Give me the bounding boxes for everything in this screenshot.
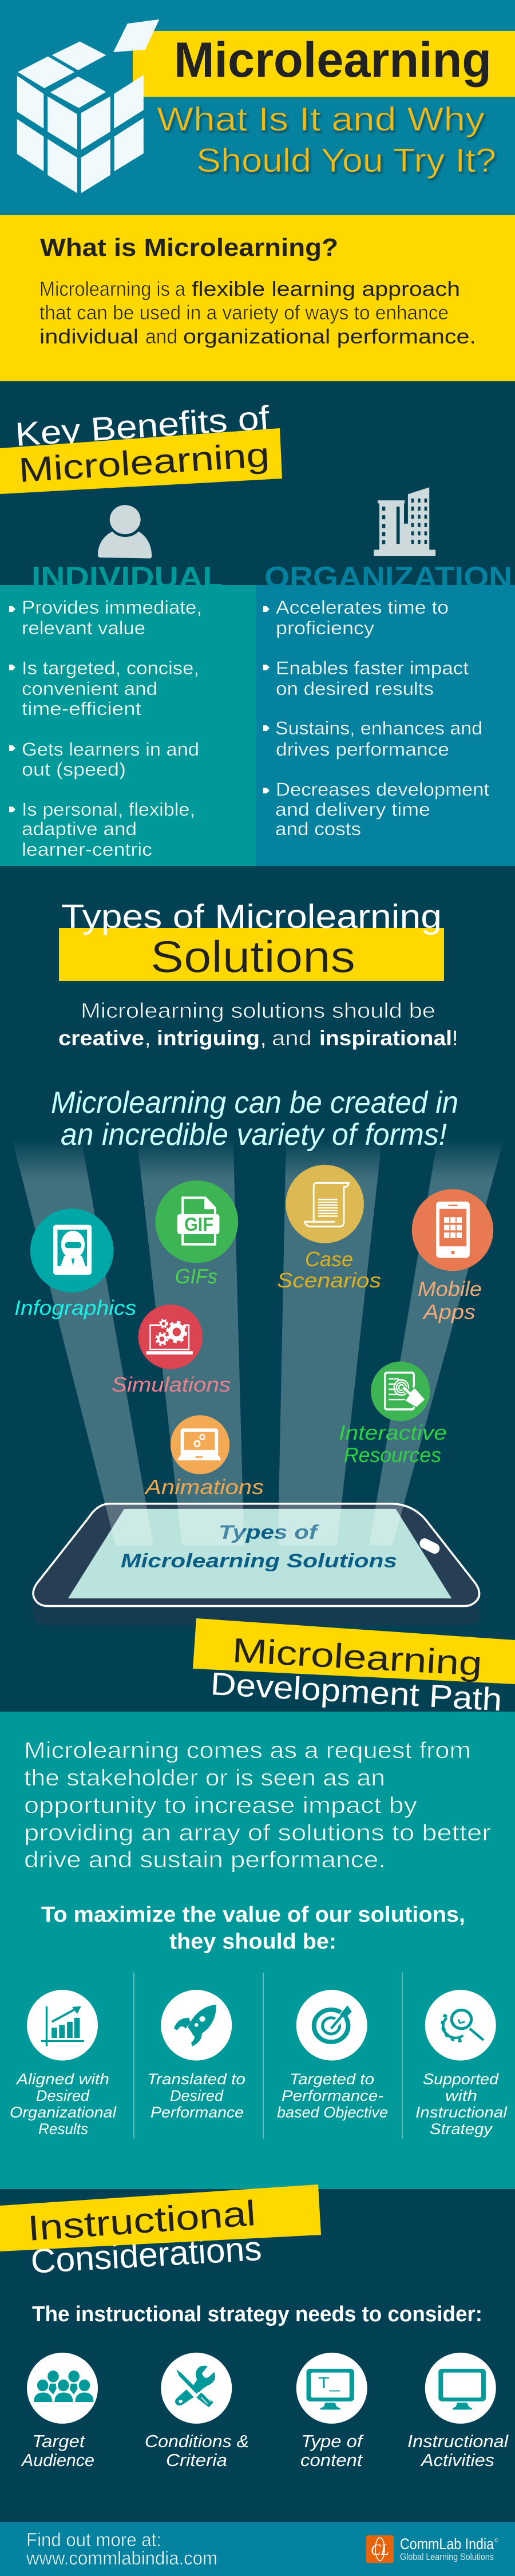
benefits list: Enables faster impact bbox=[276, 658, 469, 678]
definition text: individual bbox=[39, 325, 138, 348]
icon: rocket bbox=[161, 1990, 232, 2061]
label: conditions and criteria: Conditions & bbox=[145, 2431, 249, 2451]
icon: tools bbox=[161, 2353, 232, 2424]
subtitle: What Is It and Why bbox=[157, 101, 485, 138]
heading: What is Microlearning? bbox=[40, 234, 338, 262]
icon: monitor with text bbox=[296, 2353, 367, 2424]
text: solutions should be: inspirational bbox=[319, 1026, 452, 1050]
label: supported with instructional strategy: Supported bbox=[423, 2071, 499, 2088]
find out more: Find out more at: bbox=[26, 2529, 161, 2550]
find out more bbox=[26, 2529, 217, 2569]
label: aligned with desired organizational results: Results bbox=[38, 2120, 88, 2138]
label: conditions and criteria bbox=[145, 2431, 249, 2470]
phone screen text bbox=[121, 1522, 397, 1572]
heading: development path: Development Path bbox=[209, 1665, 503, 1717]
benefits list bbox=[275, 597, 489, 839]
label: translated to desired performance: Performance bbox=[150, 2104, 244, 2121]
subheading bbox=[41, 1903, 465, 1954]
benefits list: Is targeted, concise, bbox=[22, 658, 199, 678]
bullet markers bbox=[9, 606, 15, 812]
heading: key benefits: Microlearning bbox=[18, 436, 271, 489]
label: targeted to performance-based objective bbox=[277, 2071, 388, 2121]
subheading: To maximize the value of our solutions, bbox=[41, 1903, 465, 1927]
subtitle: Should You Try It? bbox=[196, 142, 496, 179]
definition text: and bbox=[145, 325, 177, 348]
text: solutions should be: creative bbox=[58, 1026, 144, 1050]
label: infographics: Infographics bbox=[14, 1296, 136, 1319]
benefits list: Provides immediate, bbox=[22, 597, 202, 618]
definition text: flexible learning approach bbox=[192, 277, 460, 301]
icon: building bbox=[374, 487, 435, 556]
heading: types of microlearning solutions: Types of Microlearning bbox=[61, 898, 442, 935]
heading: organization: ORGANIZATION bbox=[264, 561, 512, 594]
heading: key benefits: Key Benefits of bbox=[14, 399, 271, 453]
bullet markers bbox=[263, 606, 270, 793]
text: variety of forms: Microlearning can be created in bbox=[51, 1085, 458, 1120]
label: interactive resources bbox=[339, 1421, 447, 1467]
text: solutions should be bbox=[58, 999, 458, 1050]
label: type of content: Type of bbox=[301, 2431, 365, 2451]
definition text: organizational performance. bbox=[183, 325, 476, 348]
definition text bbox=[39, 277, 476, 348]
benefits list: drives performance bbox=[276, 739, 449, 760]
label: instructional activities: Instructional bbox=[407, 2431, 509, 2451]
text: solutions should be: , bbox=[145, 1026, 150, 1050]
title band bbox=[133, 31, 515, 97]
label: mobile apps: Mobile bbox=[418, 1277, 482, 1301]
text: solutions should be: Microlearning solutions should be bbox=[81, 999, 435, 1022]
paragraph bbox=[24, 1738, 491, 1872]
benefits list: on desired results bbox=[276, 678, 434, 699]
phone screen text: Types of bbox=[219, 1522, 320, 1543]
paragraph: drive and sustain performance. bbox=[24, 1847, 386, 1872]
phone base bbox=[33, 1592, 480, 1625]
label: target audience: Target bbox=[32, 2431, 85, 2451]
benefits list: time-efficient bbox=[22, 698, 141, 719]
label: gifs: GIFs bbox=[175, 1265, 217, 1288]
benefits list: Accelerates time to bbox=[276, 597, 449, 618]
label: supported with instructional strategy: Instructional bbox=[415, 2104, 508, 2121]
paragraph: Microlearning comes as a request from bbox=[24, 1738, 471, 1763]
label: targeted to performance-based objective: based Objective bbox=[277, 2104, 388, 2121]
icon: gif bbox=[156, 1180, 238, 1263]
heading: instructional considerations: Instructional bbox=[26, 2194, 257, 2249]
label: simulations: Simulations bbox=[112, 1373, 231, 1396]
label: instructional activities: Activities bbox=[420, 2450, 494, 2470]
panel: footer bbox=[0, 2522, 515, 2576]
icon: mobile apps bbox=[412, 1189, 493, 1271]
light beams bbox=[12, 1139, 504, 1546]
label: translated to desired performance: Translated to bbox=[147, 2071, 245, 2088]
phone screen text: Microlearning Solutions bbox=[121, 1550, 397, 1572]
icon: person bbox=[98, 505, 152, 559]
label: targeted to performance-based objective: Targeted to bbox=[290, 2071, 374, 2088]
benefits list: Is personal, flexible, bbox=[22, 799, 195, 820]
gif icon text: GIF bbox=[184, 1214, 213, 1235]
label: mobile apps bbox=[418, 1277, 482, 1323]
label: supported with instructional strategy: with bbox=[445, 2087, 477, 2104]
definition text: that can be used in a variety of ways to enhance bbox=[39, 302, 449, 324]
benefits list: Gets learners in and bbox=[22, 739, 199, 760]
benefits list: adaptive and bbox=[22, 819, 137, 839]
logo wordmark: © bbox=[494, 2538, 498, 2543]
label: type of content: content bbox=[300, 2450, 363, 2470]
panel: what is microlearning bbox=[0, 215, 515, 381]
heading: key benefits bbox=[0, 399, 282, 494]
benefits list: and costs bbox=[275, 819, 361, 839]
text: strategy needs to consider: The instructional strategy needs to consider: bbox=[32, 2302, 482, 2326]
find out more: www.commlabindia.com bbox=[26, 2547, 217, 2569]
label: aligned with desired organizational results bbox=[10, 2071, 117, 2138]
label: interactive resources: Interactive bbox=[339, 1421, 447, 1444]
icon: gear and magnifier bbox=[425, 1990, 496, 2061]
label: supported with instructional strategy: Strategy bbox=[430, 2120, 493, 2138]
label: instructional activities bbox=[407, 2431, 509, 2470]
monitor placeholder text: T_ bbox=[318, 2374, 340, 2392]
text: solutions should be: ! bbox=[452, 1026, 458, 1050]
label: aligned with desired organizational results: Aligned with bbox=[15, 2071, 109, 2088]
label: translated to desired performance bbox=[147, 2071, 245, 2121]
heading: development path: Microlearning bbox=[231, 1631, 483, 1683]
benefits list: relevant value bbox=[22, 618, 145, 638]
label: target audience bbox=[21, 2431, 94, 2470]
icon: infographics bbox=[30, 1208, 114, 1293]
logo mark: CL bbox=[371, 2541, 389, 2558]
label: interactive resources: Resources bbox=[344, 1443, 441, 1467]
text: variety of forms: an incredible variety of forms! bbox=[61, 1117, 447, 1152]
label: aligned with desired organizational results: Organizational bbox=[10, 2104, 117, 2121]
text: variety of forms bbox=[51, 1085, 458, 1152]
icon: target bbox=[296, 1990, 367, 2061]
benefits list: out (speed) bbox=[22, 759, 126, 780]
label: translated to desired performance: Desired bbox=[170, 2087, 224, 2104]
phone button bbox=[418, 1536, 441, 1555]
subtitle bbox=[157, 101, 496, 179]
icon: animations bbox=[171, 1415, 229, 1474]
logo wordmark: Global Learning Solutions bbox=[400, 2551, 494, 2562]
subheading: they should be: bbox=[169, 1930, 336, 1954]
label: aligned with desired organizational results: Desired bbox=[36, 2087, 90, 2104]
benefits list: learner-centric bbox=[22, 839, 152, 860]
label: animations: Animations bbox=[144, 1475, 264, 1499]
paragraph: providing an array of solutions to better bbox=[24, 1820, 491, 1846]
paragraph: the stakeholder or is seen as an bbox=[24, 1765, 385, 1791]
label: mobile apps: Apps bbox=[422, 1300, 476, 1323]
phone body bbox=[33, 1504, 480, 1606]
paragraph: opportunity to increase impact by bbox=[24, 1793, 417, 1818]
benefits list bbox=[22, 597, 202, 860]
label: conditions and criteria: Criteria bbox=[166, 2450, 227, 2470]
heading: instructional considerations bbox=[0, 2184, 321, 2281]
logo wordmark: CommLab India bbox=[400, 2535, 494, 2553]
label: target audience: Audience bbox=[21, 2450, 94, 2470]
logo mark bbox=[366, 2535, 394, 2563]
label: case scenarios: Case bbox=[305, 1247, 353, 1271]
definition text: Microlearning is a bbox=[39, 277, 186, 301]
panel: individual benefits bbox=[0, 585, 256, 866]
icon: audience bbox=[27, 2353, 98, 2424]
icon: case scenarios bbox=[286, 1165, 364, 1243]
text: solutions should be: and bbox=[272, 1026, 312, 1050]
benefits list: Sustains, enhances and bbox=[275, 718, 482, 738]
phone illustration bbox=[33, 1504, 480, 1625]
icon: interactive resources bbox=[371, 1361, 430, 1421]
benefits list: proficiency bbox=[276, 618, 374, 638]
heading: individual: INDIVIDUAL bbox=[31, 561, 223, 594]
title: Microlearning bbox=[174, 33, 492, 88]
phone screen bbox=[68, 1509, 451, 1598]
panel: organization benefits bbox=[256, 585, 515, 866]
icon: chart bbox=[27, 1990, 98, 2061]
label: case scenarios: Scenarios bbox=[277, 1269, 381, 1292]
text: solutions should be: intriguing bbox=[157, 1026, 260, 1050]
heading: instructional considerations: Considerations bbox=[30, 2229, 263, 2281]
logo wordmark bbox=[400, 2535, 498, 2562]
label: case scenarios bbox=[277, 1247, 381, 1292]
benefits list: and delivery time bbox=[275, 799, 430, 820]
label: targeted to performance-based objective: Performance- bbox=[282, 2087, 383, 2104]
icon: cube bbox=[17, 19, 159, 193]
benefits list: Decreases development bbox=[276, 779, 489, 800]
heading: types of microlearning solutions: Solutions bbox=[150, 931, 355, 982]
label: type of content bbox=[300, 2431, 365, 2470]
heading: development path bbox=[193, 1618, 515, 1717]
panel: development path bbox=[0, 1712, 515, 2189]
panel: header bbox=[0, 0, 515, 215]
benefits list: convenient and bbox=[22, 678, 157, 699]
icon: simulations bbox=[138, 1305, 203, 1369]
icon: monitor bbox=[425, 2353, 496, 2424]
text: solutions should be: , bbox=[260, 1026, 266, 1050]
label: supported with instructional strategy bbox=[415, 2071, 508, 2138]
heading: types of microlearning solutions bbox=[59, 898, 444, 982]
